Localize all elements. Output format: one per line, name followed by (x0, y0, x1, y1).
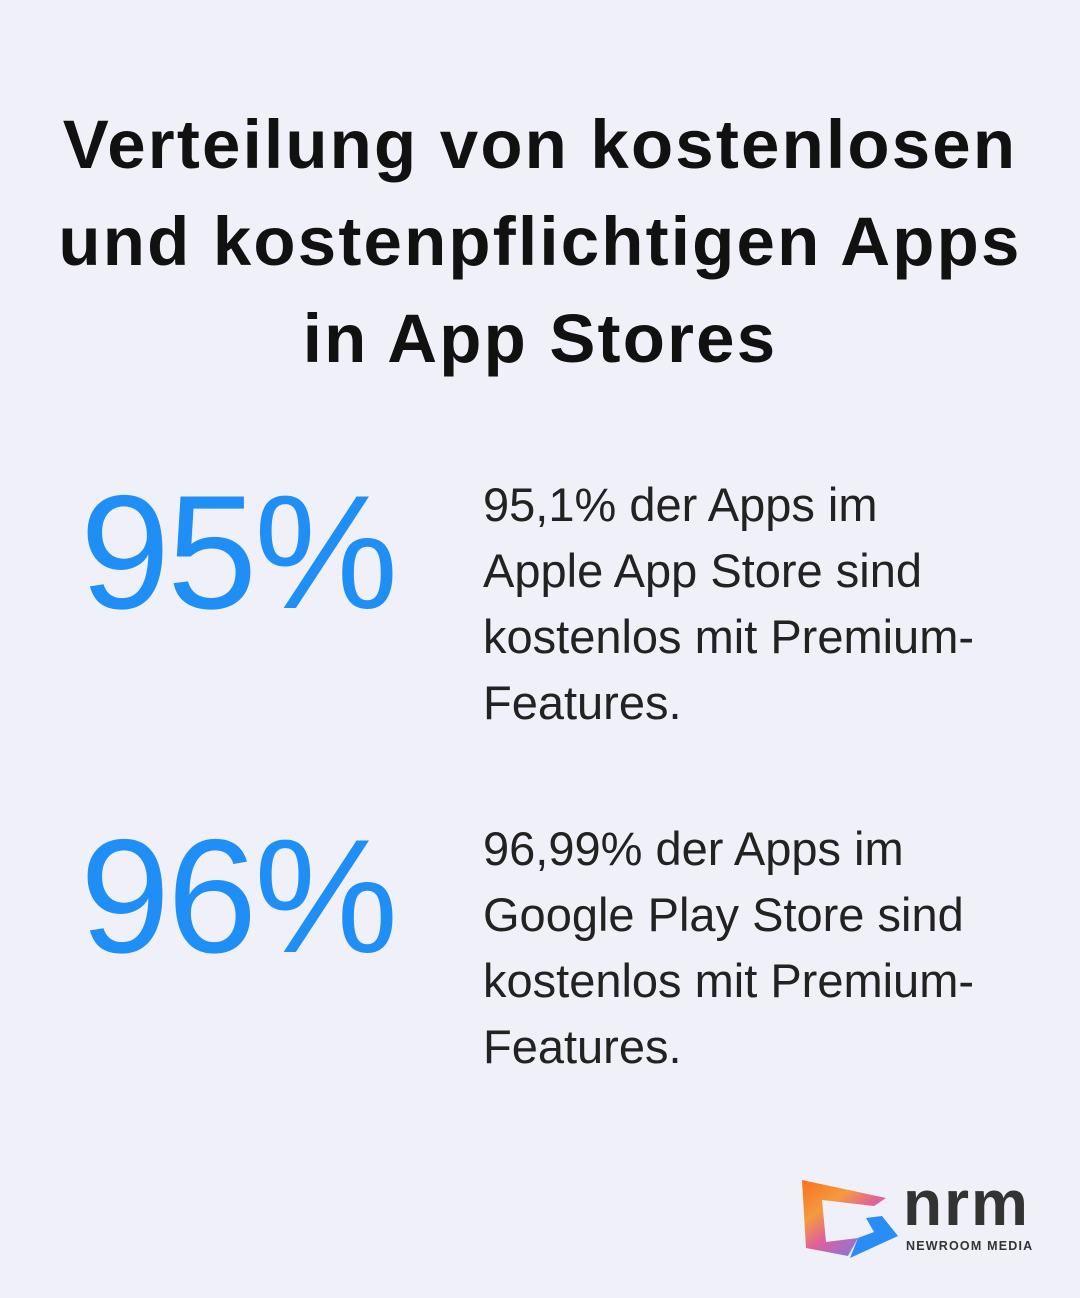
title: Verteilung von kostenlosen (63, 106, 1017, 183)
title (58, 106, 1022, 377)
text: google: 96,99% der Apps im (483, 822, 904, 875)
brand text: nrm (903, 1167, 1030, 1239)
title: in App Stores (303, 300, 777, 377)
text: google: Features. (483, 1020, 682, 1073)
text: apple (483, 478, 974, 729)
text: google (483, 822, 974, 1073)
text: apple: 95,1% der Apps im (483, 478, 878, 531)
text: google: kostenlos mit Premium- (483, 954, 974, 1007)
text: apple: Features. (483, 676, 682, 729)
title: und kostenpflichtigen Apps (58, 203, 1022, 280)
text: apple: Apple App Store sind (483, 544, 922, 597)
text: apple: kostenlos mit Premium- (483, 610, 974, 663)
stat: 95%: 95% (80, 462, 395, 643)
text: google: Google Play Store sind (483, 888, 964, 941)
logo: NEWROOM MEDIA (906, 1239, 1033, 1253)
logo (802, 1167, 1033, 1258)
stat: 96%: 96% (80, 806, 395, 987)
icon: logo mark (802, 1180, 898, 1258)
